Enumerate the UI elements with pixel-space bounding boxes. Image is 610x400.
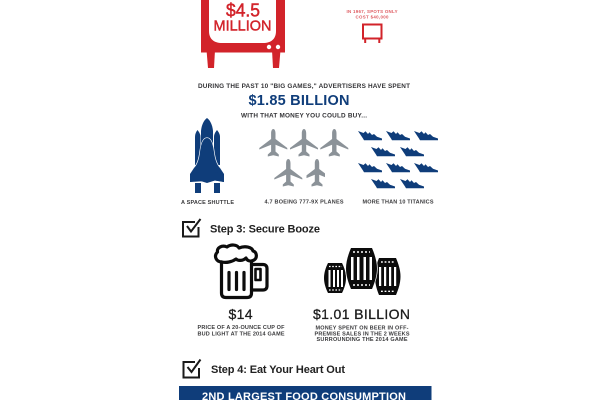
- banner: 2nd largest food consumption: [179, 386, 432, 400]
- heading: step 3: Step 3: Secure Booze: [210, 224, 320, 236]
- stat: $1.01 billion: $1.01 BILLION: [313, 306, 410, 322]
- heading: $1.85 billion: $1.85 BILLION: [248, 93, 350, 109]
- caption: bud light price: [198, 325, 285, 338]
- icon: large red TV with $4.5 million: MILLION: [214, 18, 272, 34]
- icon: large red TV with $4.5 million: [201, 0, 285, 68]
- stat: $14: $14: [228, 306, 253, 322]
- text: with that money: WITH THAT MONEY YOU COULD BUY...: [241, 112, 367, 120]
- caption: planes: 4.7 BOEING 777-9X PLANES: [264, 200, 344, 206]
- caption: bud light price: PRICE OF A 20-OUNCE CUP OF: [198, 325, 285, 331]
- callout: 1967 spot cost: [346, 9, 398, 20]
- icon: small red TV: [363, 24, 382, 43]
- caption: beer sales: SURROUNDING THE 2014 GAME: [316, 337, 408, 343]
- icon: ten Titanics: [358, 131, 438, 188]
- caption: beer sales: MONEY SPENT ON BEER IN OFF-: [316, 326, 409, 332]
- caption: a space shuttle: A SPACE SHUTTLE: [181, 200, 234, 206]
- text: advertisers have spent: DURING THE PAST 10 "BIG GAMES," ADVERTISERS HAVE SPENT: [198, 83, 410, 90]
- icon: beer mug: [216, 245, 267, 298]
- icon: beer barrels: [324, 248, 400, 295]
- icon: five Boeing planes: [259, 129, 348, 186]
- icon: large red TV with $4.5 million: $4.5: [226, 0, 260, 20]
- icon: checkbox step 3: [183, 219, 200, 236]
- icon: checkbox step 4: [184, 360, 200, 378]
- icon: space shuttle: [190, 118, 224, 193]
- caption: titanics: MORE THAN 10 TITANICS: [362, 200, 434, 206]
- heading: step 4: Step 4: Eat Your Heart Out: [211, 364, 345, 376]
- callout: 1967 spot cost: COST $40,000: [356, 15, 389, 20]
- callout: 1967 spot cost: IN 1967, SPOTS ONLY: [346, 9, 398, 14]
- caption: beer sales: PREMISE SALES IN THE 2 WEEKS: [314, 331, 410, 337]
- caption: bud light price: BUD LIGHT AT THE 2014 GAME: [198, 332, 285, 338]
- caption: beer sales: [314, 326, 410, 343]
